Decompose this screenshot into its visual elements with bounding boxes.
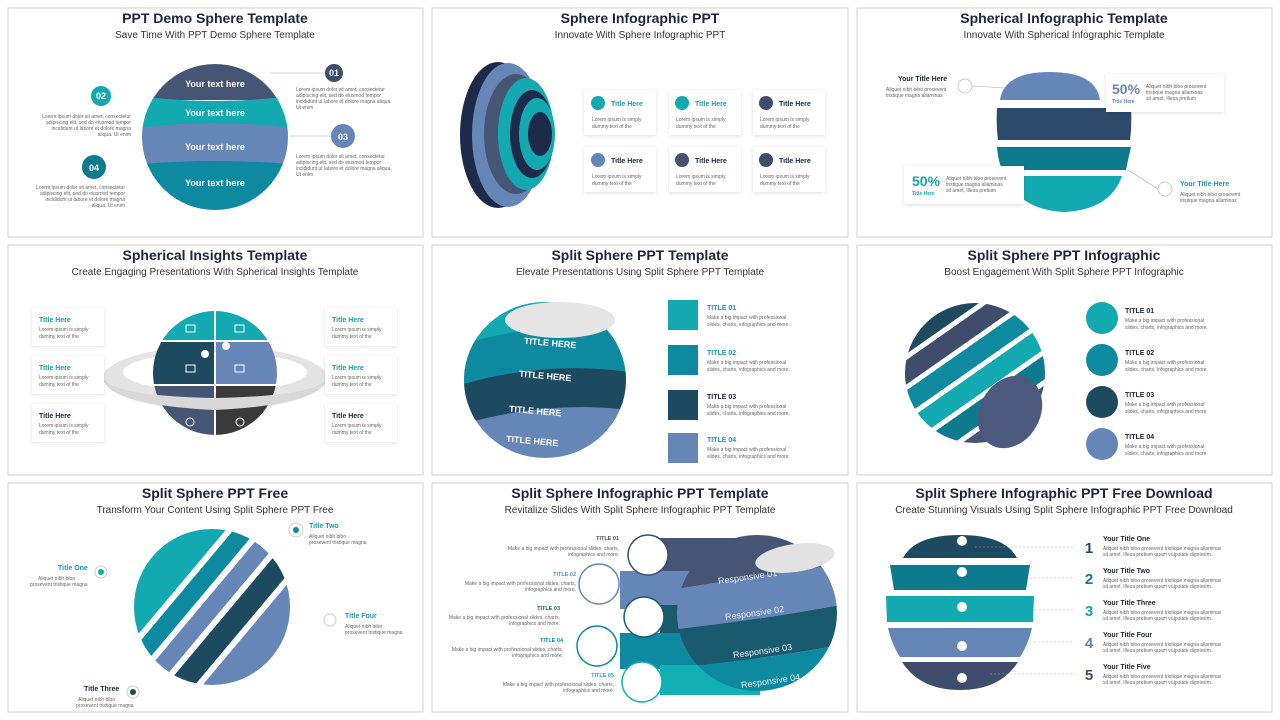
callout: 50% top right: sit amet, Illeus pretium [1146, 96, 1196, 102]
side cards: Title Here [332, 317, 364, 324]
panel: PPT Demo Sphere Template [8, 8, 423, 237]
side cards: Lorem ipsum is simply [332, 375, 382, 381]
callout: 50% bottom left: sit amet, Illeus pretium [946, 188, 996, 194]
list items: Make a big impact with professional [707, 315, 786, 321]
list text [449, 536, 619, 694]
numbered list: Your Title Two [1103, 568, 1150, 575]
callout: top left: tristique magna aliaminas [886, 93, 943, 99]
banded sphere with bars [620, 530, 840, 700]
callout 03: Lorem ipsum dolor sit amet, consectetur [296, 154, 385, 160]
callout: 50% top right: 50% [1112, 81, 1141, 97]
subtitle: Create Stunning Visuals Using Split Sphere Infographic PPT Free Download [895, 505, 1233, 516]
banded sphere with bars: Responsive 01 [717, 568, 778, 586]
numbered list: sit amet. Illeus pretium quam vulputate dignissim. [1103, 616, 1212, 622]
callout 04: 04 [89, 163, 99, 173]
numbered list: Aliquet nibh bibo prosevent tristique magna aliaminas [1103, 546, 1222, 552]
cards grid: Lorem ipsum is simply [592, 117, 642, 123]
concentric ring sphere [460, 62, 555, 208]
list items: Make a big impact with professional [707, 360, 786, 366]
side cards: Lorem ipsum is simply [39, 423, 89, 429]
numbered list: Aliquet nibh bibo prosevent tristique magna aliaminas [1103, 578, 1222, 584]
callout: Title Four [324, 613, 403, 636]
side cards: Lorem ipsum is simply [39, 327, 89, 333]
callout 02: aliqua. Ut enim [98, 132, 131, 138]
banded sphere: TITLE HERE [524, 336, 577, 350]
callout: Title Four: Title Four [345, 613, 377, 620]
callout: Title Three: Aliquet nibh bibo [78, 697, 115, 703]
numbered list: 3 [1085, 603, 1093, 620]
cards grid: Title Here [779, 101, 811, 108]
callout: 50% bottom left: Aliquet nibh bibo prosevent [946, 176, 1007, 182]
banded sphere: TITLE HERE [519, 369, 572, 383]
list items: slides, charts, infographics and more. [1125, 451, 1208, 457]
callout: top left [886, 76, 1005, 99]
callout 03 [290, 124, 392, 178]
callout: 50% top right: Aliquet nibh bibo prosevent [1146, 84, 1207, 90]
stacked slices [886, 535, 1034, 690]
ringed sphere [103, 308, 327, 436]
list items: Make a big impact with professional [1125, 318, 1204, 324]
callout: Title Three: Title Three [84, 686, 119, 693]
numbered list: 4 [1085, 635, 1094, 652]
banded sphere with bars: Responsive 04 [740, 672, 801, 690]
numbered list: 5 [1085, 667, 1093, 684]
numbered list: Your Title One [1103, 536, 1150, 543]
list items: slides, charts, infographics and more. [1125, 367, 1208, 373]
panel: Spherical Insights Template [8, 245, 423, 475]
callout: 50% bottom left [904, 166, 1024, 204]
callout: top left: Aliquet nibh bibo prosevent [886, 87, 947, 93]
icon circles [577, 535, 668, 702]
subtitle: Innovate With Spherical Infographic Template [963, 30, 1165, 41]
banded sphere: TITLE HERE [509, 404, 562, 418]
side cards: Lorem ipsum is simply [332, 327, 382, 333]
callout 03: adipiscing elit, sed do eiusmod tempor [296, 160, 381, 166]
list text: TITLE 03 [537, 606, 560, 612]
list text: infographics and more. [568, 552, 619, 558]
callout: Title Four: Aliquet nibh bibo [345, 624, 382, 630]
list text: TITLE 05 [591, 673, 614, 679]
callout 02 [42, 86, 131, 138]
numbered list: Your Title Five [1103, 664, 1151, 671]
callout 01: incididunt ut labore et dolore magna aliqua. [296, 99, 392, 105]
numbered list: Your Title Four [1103, 632, 1152, 639]
panel: Split Sphere Infographic PPT Template [432, 483, 848, 712]
numbered list: 1 [1085, 540, 1093, 557]
callout: bottom right: tristique magna aliaminas [1180, 198, 1237, 204]
list items: slides, charts, infographics and more. [707, 454, 790, 460]
side cards: Title Here [39, 413, 71, 420]
panel: Split Sphere Infographic PPT Free Download [857, 483, 1272, 712]
side cards: dummy text of the [332, 334, 372, 340]
cards grid: Title Here [611, 158, 643, 165]
list items [668, 300, 790, 463]
callout 01: 01 [329, 68, 339, 78]
list text: infographics and more. [563, 688, 614, 694]
heading: Spherical Insights Template [123, 247, 308, 263]
callout: 50% bottom left: tristique magna aliaminas [946, 182, 1003, 188]
list items: TITLE 02 [1125, 350, 1154, 357]
side cards: dummy text of the [39, 334, 79, 340]
callout 03: Ut enim [296, 172, 313, 178]
cards grid: Title Here [695, 101, 727, 108]
callout: Title Two [289, 523, 367, 546]
numbered list: Aliquet nibh bibo prosevent tristique magna aliaminas [1103, 610, 1222, 616]
banded sphere [460, 300, 630, 460]
sphere with bands: Your text here [185, 178, 245, 188]
subtitle: Innovate With Sphere Infographic PPT [555, 30, 725, 41]
callout: Title Two: Title Two [309, 523, 339, 530]
panel: Spherical Infographic Template [857, 8, 1272, 237]
callout: 50% top right [1106, 74, 1224, 112]
list items: TITLE 04 [1125, 434, 1154, 441]
list items: TITLE 02 [707, 350, 736, 357]
subtitle: Save Time With PPT Demo Sphere Template [115, 30, 315, 41]
side cards: Lorem ipsum is simply [39, 375, 89, 381]
subtitle: Transform Your Content Using Split Sphere PPT Free [97, 505, 334, 516]
list items: Make a big impact with professional [1125, 360, 1204, 366]
heading: Split Sphere PPT Infographic [968, 247, 1161, 263]
numbered list: sit amet. Illeus pretium quam vulputate dignissim. [1103, 552, 1212, 558]
callout: Title Two: Aliquet nibh bibo [309, 534, 346, 540]
sphere with bands: Your text here [185, 108, 245, 118]
list items: slides, charts, infographics and more. [707, 367, 790, 373]
numbered list: Aliquet nibh bibo prosevent tristique magna aliaminas [1103, 674, 1222, 680]
side cards: Lorem ipsum is simply [332, 423, 382, 429]
side cards: Title Here [332, 413, 364, 420]
heading: Sphere Infographic PPT [561, 10, 720, 26]
callout: Title Two: prosevent tristique magna [309, 540, 367, 546]
cards grid: Lorem ipsum is simply [676, 117, 726, 123]
sphere with bands: Your text here [185, 142, 245, 152]
list text: infographics and more. [525, 587, 576, 593]
heading: Split Sphere Infographic PPT Free Download [915, 485, 1213, 501]
side cards: dummy text of the [332, 382, 372, 388]
list items: TITLE 01 [1125, 308, 1154, 315]
callout 04: aliqua. Ut enim [92, 203, 125, 209]
list items: slides, charts, infographics and more. [707, 411, 790, 417]
numbered list: Aliquet nibh bibo prosevent tristique magna aliaminas [1103, 642, 1222, 648]
list items: slides, charts, infographics and more. [1125, 325, 1208, 331]
callout 02: adipiscing elit, sed do eiusmod tempor [46, 120, 131, 126]
cards grid: dummy text of the [676, 181, 716, 187]
callout 04: Lorem ipsum dolor sit amet, consectetur [36, 185, 125, 191]
callout: bottom right: Your Title Here [1180, 181, 1229, 188]
list items [1086, 302, 1208, 460]
cards grid: Title Here [779, 158, 811, 165]
subtitle: Elevate Presentations Using Split Sphere PPT Template [516, 267, 764, 278]
banded sphere with bars: Responsive 03 [732, 642, 793, 660]
callout: bottom right: Aliquet nibh bibo prosevent [1180, 192, 1241, 198]
callout 04: adipiscing elit, sed do eiusmod tempor [40, 191, 125, 197]
callout 01: Lorem ipsum dolor sit amet, consectetur [296, 87, 385, 93]
numbered list: 2 [1085, 571, 1093, 588]
cards grid [584, 90, 825, 192]
cards grid: Title Here [695, 158, 727, 165]
list text: Make a big impact with professional slides, charts, [503, 682, 614, 688]
diagonal split sphere [134, 529, 290, 685]
sphere with bands: Your text here [185, 79, 245, 89]
numbered list: sit amet. Illeus pretium quam vulputate dignissim. [1103, 680, 1212, 686]
cards grid: dummy text of the [760, 124, 800, 130]
cards grid: dummy text of the [592, 124, 632, 130]
cards grid: Lorem ipsum is simply [760, 117, 810, 123]
callout 01: Ut enim [296, 105, 313, 111]
list items: Make a big impact with professional [707, 404, 786, 410]
banded sphere with bars: Responsive 02 [724, 604, 785, 622]
list text: Make a big impact with professional slides, charts, [452, 647, 563, 653]
subtitle: Boost Engagement With Split Sphere PPT Infographic [944, 267, 1184, 278]
callout: 50% bottom left: Title Here [912, 191, 935, 197]
list items: Make a big impact with professional [707, 447, 786, 453]
callout: Title One: Aliquet nibh bibo [38, 576, 75, 582]
numbered list: Your Title Three [1103, 600, 1156, 607]
panel: Sphere Infographic PPT [432, 8, 848, 237]
heading: Spherical Infographic Template [960, 10, 1168, 26]
numbered list: sit amet. Illeus pretium quam vulputate dignissim. [1103, 648, 1212, 654]
sliced sphere [997, 72, 1131, 212]
callout 02: 02 [96, 91, 106, 101]
callout 03: incididunt ut labore et dolore magna aliqua. [296, 166, 392, 172]
heading: Split Sphere PPT Free [142, 485, 288, 501]
callout 04: incididunt ut labore et dolore magna [46, 197, 125, 203]
panel: Split Sphere PPT Infographic [853, 245, 1272, 493]
side cards: dummy text of the [39, 430, 79, 436]
diagonal striped sphere [905, 303, 1045, 448]
callout 02: Lorem ipsum dolor sit amet, consectetur [42, 114, 131, 120]
list text: TITLE 01 [596, 536, 619, 542]
callout 01: adipiscing elit, sed do eiusmod tempor [296, 93, 381, 99]
list text: TITLE 04 [540, 638, 564, 644]
callout: Title One: prosevent tristique magna [30, 582, 88, 588]
heading: Split Sphere PPT Template [551, 247, 729, 263]
callout 03: 03 [338, 132, 348, 142]
list text: infographics and more. [512, 653, 563, 659]
cards grid: Lorem ipsum is simply [592, 174, 642, 180]
callout: Title Three: prosevent tristique magna [76, 703, 134, 709]
list items: TITLE 04 [707, 437, 736, 444]
cards grid: dummy text of the [592, 181, 632, 187]
cards grid: Lorem ipsum is simply [760, 174, 810, 180]
subtitle: Create Engaging Presentations With Spherical Insights Template [72, 267, 359, 278]
callout: top left: Your Title Here [898, 76, 947, 83]
side cards: Title Here [332, 365, 364, 372]
callout: bottom right [1128, 170, 1241, 204]
callout 01 [270, 64, 392, 111]
list text: Make a big impact with professional slides, charts, [449, 615, 560, 621]
list items: Make a big impact with professional [1125, 444, 1204, 450]
list text: TITLE 02 [553, 572, 576, 578]
side cards: dummy text of the [332, 430, 372, 436]
numbered list: sit amet. Illeus pretium quam vulputate dignissim. [1103, 584, 1212, 590]
callout: 50% bottom left: 50% [912, 173, 941, 189]
callout: Title One: Title One [58, 565, 88, 572]
heading: Split Sphere Infographic PPT Template [511, 485, 769, 501]
subtitle: Revitalize Slides With Split Sphere Infographic PPT Template [505, 505, 776, 516]
callout: 50% top right: Title Here [1112, 99, 1135, 105]
side cards: Title Here [39, 317, 71, 324]
callout: Title Three [76, 686, 139, 709]
list items: slides, charts, infographics and more. [1125, 409, 1208, 415]
cards grid: Title Here [611, 101, 643, 108]
side cards [32, 308, 397, 442]
callout: Title Four: prosevent tristique magna [345, 630, 403, 636]
heading: PPT Demo Sphere Template [122, 10, 308, 26]
numbered list [975, 536, 1222, 686]
callout 04 [36, 155, 125, 209]
panel: Split Sphere PPT Template [432, 245, 848, 475]
sphere with bands [140, 60, 290, 215]
callout: Title One [30, 565, 107, 588]
panel: Split Sphere PPT Free [8, 468, 423, 720]
side cards: Title Here [39, 365, 71, 372]
list items: slides, charts, infographics and more. [707, 322, 790, 328]
banded sphere: TITLE HERE [506, 434, 559, 448]
list items: TITLE 03 [1125, 392, 1154, 399]
cards grid: dummy text of the [760, 181, 800, 187]
list text: Make a big impact with professional slides, charts, [508, 546, 619, 552]
list items: TITLE 01 [707, 305, 736, 312]
cards grid: dummy text of the [676, 124, 716, 130]
list items: TITLE 03 [707, 394, 736, 401]
list text: infographics and more. [509, 621, 560, 627]
list items: Make a big impact with professional [1125, 402, 1204, 408]
side cards: dummy text of the [39, 382, 79, 388]
callout: 50% top right: tristique magna aliaminas [1146, 90, 1203, 96]
cards grid: Lorem ipsum is simply [676, 174, 726, 180]
list text: Make a big impact with professional slides, charts, [465, 581, 576, 587]
callout 02: incididunt ut labore et dolore magna [52, 126, 131, 132]
